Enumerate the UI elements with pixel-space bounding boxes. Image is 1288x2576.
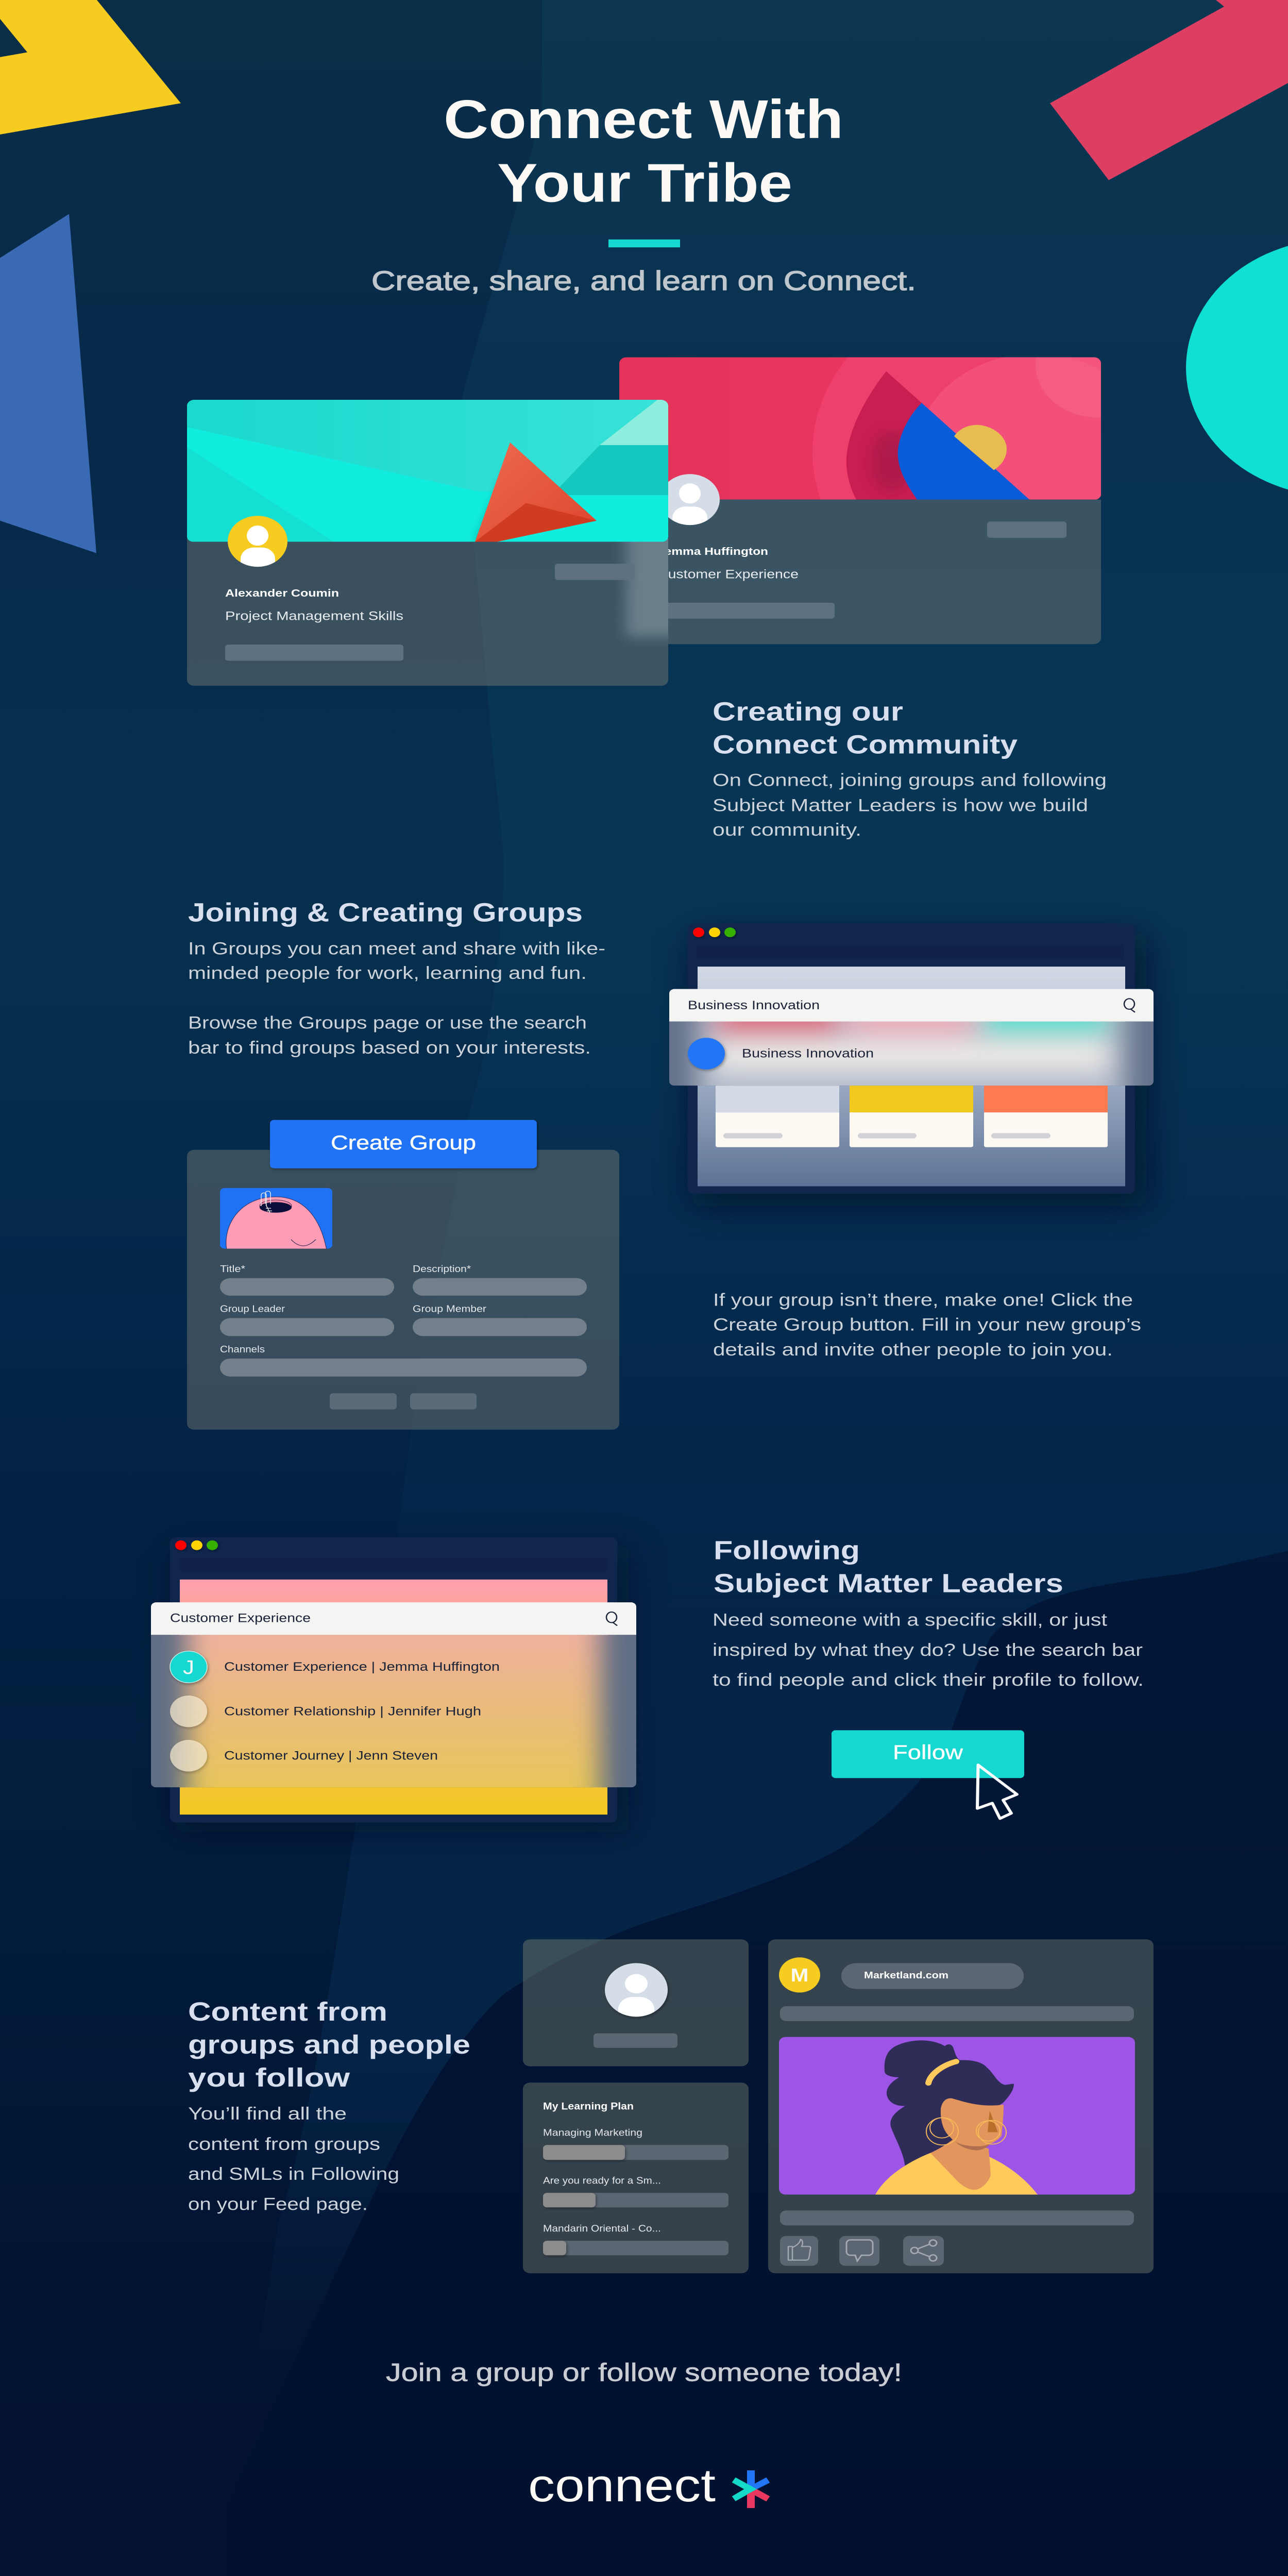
text block: creating our connect community bbox=[713, 697, 1107, 839]
text block: if your group isn't there: details and invite other people to join you. bbox=[713, 1340, 1113, 1359]
heading: Connect Community bbox=[713, 730, 1018, 759]
body: Need someone with a specific skill, or just bbox=[713, 1609, 1108, 1630]
body: Browse the Groups page or use the search bbox=[188, 1012, 587, 1032]
icon: search bbox=[606, 1612, 617, 1625]
title bbox=[444, 89, 843, 213]
heading: Subject Matter Leaders bbox=[714, 1569, 1063, 1598]
panel: groups browser window bbox=[644, 924, 1180, 1206]
panel: feed post bbox=[768, 1939, 1154, 2273]
card body and contents bbox=[668, 474, 1101, 644]
text block: joining and creating groups bbox=[188, 897, 605, 1057]
heading: Joining & Creating Groups bbox=[188, 897, 583, 927]
body bbox=[188, 2104, 399, 2214]
bottom bar bbox=[780, 2210, 1134, 2225]
create group button bbox=[270, 1120, 537, 1168]
bar bbox=[594, 2033, 677, 2048]
body: On Connect, joining groups and following bbox=[713, 770, 1107, 790]
text block: if your group isn't there: If your group isn’t there, make one! Click the bbox=[713, 1290, 1133, 1310]
role: Customer Experience bbox=[657, 567, 799, 581]
glass results panel bbox=[103, 1580, 685, 1815]
body: Subject Matter Leaders is how we build bbox=[713, 795, 1088, 815]
bar bbox=[225, 645, 403, 661]
text block: if your group isn't there bbox=[713, 1290, 1141, 1359]
avatar: yellow bbox=[228, 516, 287, 574]
body: In Groups you can meet and share with like- bbox=[188, 938, 605, 958]
body: You’ll find all the bbox=[188, 2104, 347, 2123]
shape: blue triangle bbox=[0, 214, 96, 553]
logo wordmark: connect bbox=[528, 2459, 716, 2511]
heading bbox=[713, 697, 1018, 759]
form labels bbox=[220, 1263, 486, 1355]
illustration: woman portrait bbox=[779, 2037, 1135, 2195]
window dots bbox=[693, 927, 736, 937]
result row: Jennifer bbox=[170, 1696, 481, 1727]
heading: My Learning Plan bbox=[543, 2100, 634, 2112]
icon: cursor arrow bbox=[977, 1765, 1017, 1819]
search text: Business Innovation bbox=[688, 998, 820, 1012]
follow button bbox=[832, 1730, 1024, 1778]
course: are you ready bbox=[543, 2175, 728, 2207]
panel: back profile card bbox=[619, 357, 1101, 644]
result row: Jemma: Customer Experience | Jemma Huffington bbox=[224, 1659, 500, 1674]
body: to find people and click their profile to follow. bbox=[713, 1670, 1144, 1690]
bar bbox=[657, 603, 835, 619]
body: our community. bbox=[713, 820, 861, 839]
form labels: Group Member bbox=[413, 1303, 486, 1314]
subtitle: Create, share, and learn on Connect. bbox=[371, 266, 916, 296]
form labels: Title* bbox=[220, 1263, 245, 1274]
panel: create group form bbox=[187, 1120, 619, 1430]
window dots bbox=[175, 1540, 218, 1550]
shape: pink corner polygon bbox=[1050, 0, 1288, 180]
avatar: M: M bbox=[791, 1965, 808, 1986]
name: Alexander Coumin bbox=[225, 587, 339, 599]
form labels: Description* bbox=[413, 1263, 471, 1274]
title: Your Tribe bbox=[497, 153, 792, 213]
panel: my learning plan bbox=[523, 2082, 749, 2273]
address bar bbox=[697, 945, 1124, 960]
body: content from groups bbox=[188, 2134, 380, 2154]
text block: content from groups bbox=[188, 1997, 470, 2214]
course: managing marketing bbox=[543, 2127, 728, 2160]
panel: front profile card bbox=[187, 400, 688, 686]
title: Connect With bbox=[444, 89, 843, 150]
address bar bbox=[180, 1558, 607, 1573]
text block: following subject matter leaders bbox=[713, 1536, 1144, 1690]
form buttons bbox=[330, 1393, 477, 1410]
icon: search bbox=[1124, 998, 1135, 1012]
result row: Jennifer: Customer Relationship | Jennifer Hugh bbox=[224, 1704, 481, 1718]
heading bbox=[188, 1997, 470, 2092]
icon: comment bubble bbox=[839, 2236, 879, 2266]
body: bar to find groups based on your interests. bbox=[188, 1038, 591, 1057]
result text: Business Innovation bbox=[742, 1046, 874, 1060]
accent bar bbox=[608, 240, 680, 247]
shape: yellow corner polygon bbox=[0, 0, 181, 134]
icon: thumbs up bbox=[780, 2236, 818, 2266]
heading: Creating our bbox=[713, 697, 903, 726]
teal header bbox=[187, 400, 668, 542]
text block: if your group isn't there: Create Group button. Fill in your new group’s bbox=[713, 1314, 1141, 1334]
result row: Jemma: J bbox=[183, 1656, 194, 1678]
logo bbox=[528, 2459, 770, 2511]
body: inspired by what they do? Use the search bar bbox=[713, 1640, 1143, 1660]
avatar bbox=[605, 1963, 668, 2023]
create group button: Create Group bbox=[331, 1131, 476, 1154]
avatar: M bbox=[779, 1957, 820, 1992]
heading: groups and people bbox=[188, 2030, 470, 2059]
form labels: Channels bbox=[220, 1344, 265, 1355]
course: are you ready: Are you ready for a Sm... bbox=[543, 2175, 661, 2186]
logo asterisk bbox=[732, 2470, 770, 2508]
result row: Jenn: Customer Journey | Jenn Steven bbox=[224, 1748, 438, 1762]
site name pill: Marketland.com bbox=[864, 1970, 948, 1981]
icon: share bbox=[903, 2236, 944, 2266]
result row: Jemma bbox=[170, 1651, 500, 1683]
body bbox=[713, 770, 1107, 839]
body: and SMLs in Following bbox=[188, 2164, 399, 2183]
closing call to action: Join a group or follow someone today! bbox=[386, 2358, 902, 2386]
course: managing marketing: Managing Marketing bbox=[543, 2127, 642, 2138]
course: mandarin oriental bbox=[543, 2223, 728, 2255]
follow button: Follow bbox=[893, 1741, 963, 1764]
heading: you follow bbox=[188, 2063, 350, 2092]
panel: profile mini card bbox=[523, 1939, 749, 2066]
pink card header bbox=[619, 357, 1101, 500]
site name pill bbox=[841, 1963, 1024, 1989]
avatar: grey bbox=[668, 474, 720, 526]
result row: Jenn bbox=[170, 1740, 438, 1772]
body bbox=[188, 938, 605, 1057]
heading: Following bbox=[714, 1536, 860, 1565]
group image thumbnail bbox=[220, 1188, 332, 1250]
search bar bbox=[151, 1602, 636, 1635]
glass results panel bbox=[644, 984, 1180, 1107]
name: Jemma Huffington bbox=[657, 546, 768, 557]
role: Project Management Skills bbox=[225, 608, 403, 623]
page area bbox=[180, 1580, 607, 1815]
form fields bbox=[220, 1278, 587, 1377]
heading bbox=[714, 1536, 1063, 1598]
top bar bbox=[780, 2006, 1134, 2021]
form labels: Group Leader bbox=[220, 1303, 285, 1314]
button bbox=[987, 521, 1066, 538]
group cards bbox=[716, 1072, 1108, 1147]
heading: Content from bbox=[188, 1997, 387, 2026]
body: on your Feed page. bbox=[188, 2194, 368, 2214]
search bar bbox=[669, 989, 1154, 1022]
course: mandarin oriental: Mandarin Oriental - Co... bbox=[543, 2223, 661, 2234]
result avatar bbox=[688, 1038, 725, 1070]
body bbox=[713, 1609, 1144, 1690]
shape: teal circle bbox=[1186, 239, 1288, 497]
glass body bbox=[187, 514, 688, 686]
body: minded people for work, learning and fun. bbox=[188, 963, 587, 982]
button bbox=[555, 564, 635, 580]
page area bbox=[698, 967, 1125, 1187]
search text: Customer Experience bbox=[170, 1611, 311, 1625]
panel: people browser window bbox=[103, 1537, 685, 1832]
